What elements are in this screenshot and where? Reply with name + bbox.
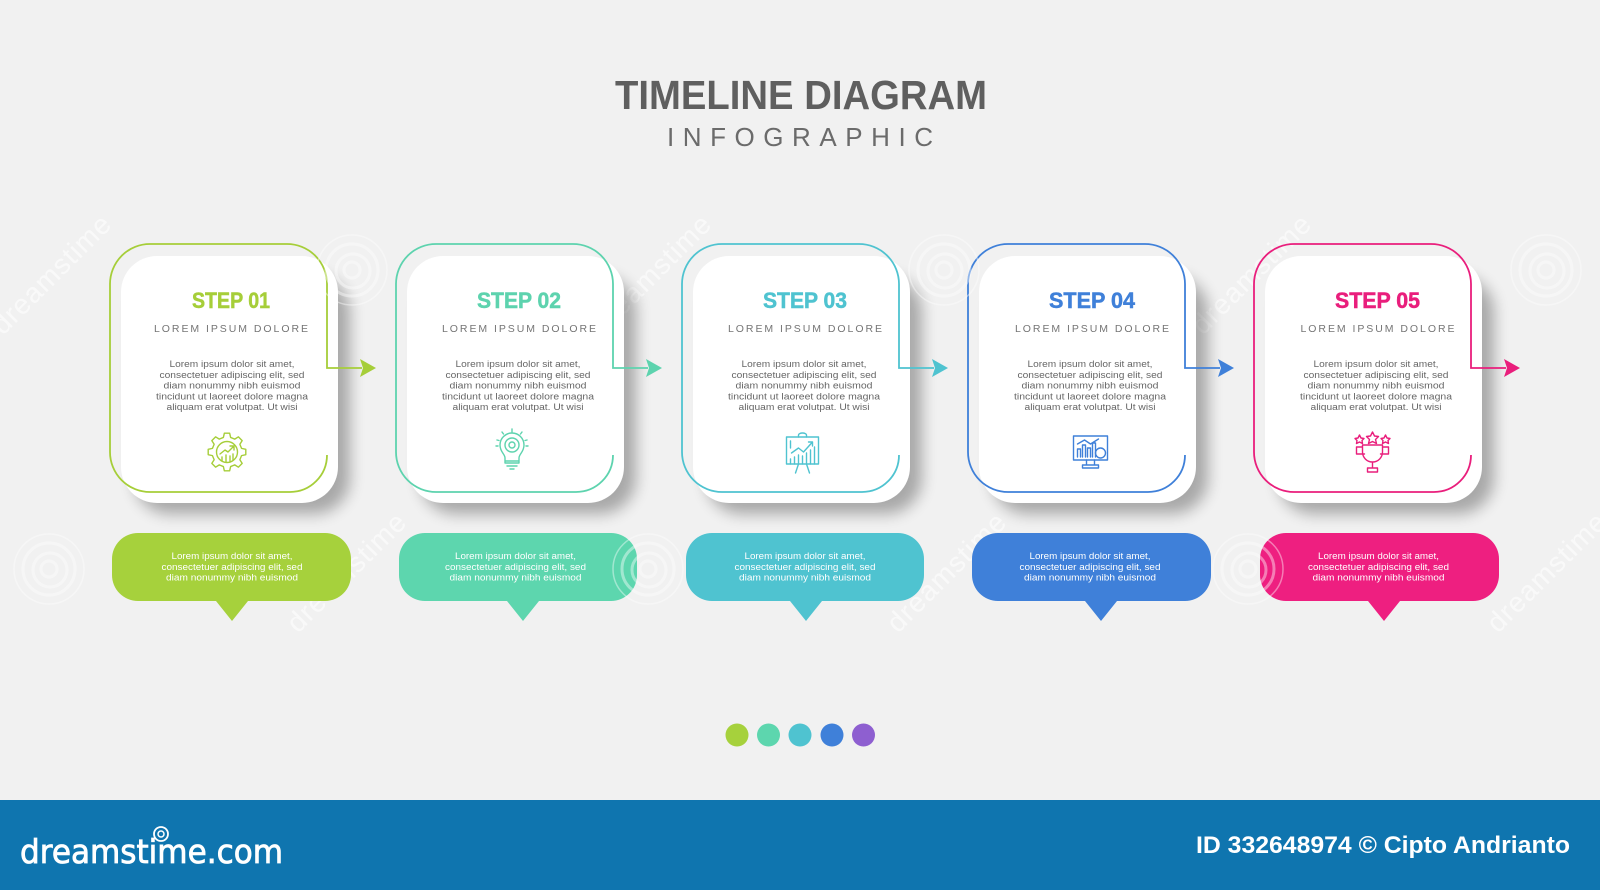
callout: step 02 bubble: Lorem ipsum dolor sit amet, <box>455 551 576 562</box>
panel: step 04: tincidunt ut laoreet dolore magna <box>1014 392 1167 402</box>
panel: step 05: diam nonummy nibh euismod <box>1308 380 1444 392</box>
panel: step 02: Lorem ipsum dolor sit amet, <box>456 359 580 370</box>
callout: step 03 bubble: diam nonummy nibh euismod <box>739 572 871 584</box>
panel: step 01: aliquam erat volutpat. Ut wisi <box>166 402 298 413</box>
panel: step 03: diam nonummy nibh euismod <box>736 380 872 392</box>
panel: step 02: consectetuer adipiscing elit, sed <box>446 370 590 381</box>
panel: step 04: Lorem ipsum dolor sit amet, <box>1028 359 1152 370</box>
panel: step 01: LOREM IPSUM DOLORE <box>154 323 308 335</box>
panel: step 02: aliquam erat volutpat. Ut wisi <box>452 402 584 413</box>
panel: step 04: LOREM IPSUM DOLORE <box>1015 323 1169 335</box>
panel: step 01 <box>110 244 376 514</box>
footer bar <box>0 800 1600 890</box>
panel: step 05: LOREM IPSUM DOLORE <box>1300 323 1454 335</box>
watermark text: dreamstime background: dreamstime <box>1185 208 1318 340</box>
callout: step 05 bubble: Lorem ipsum dolor sit amet, <box>1318 551 1439 562</box>
panel: step 03: consectetuer adipiscing elit, sed <box>732 370 876 381</box>
callout: step 01 bubble <box>112 533 351 621</box>
panel: step 03: STEP 03 <box>763 288 847 313</box>
panel: step 01: diam nonummy nibh euismod <box>164 380 300 392</box>
callout: step 01 bubble: Lorem ipsum dolor sit amet, <box>172 551 292 562</box>
panel: step 05: aliquam erat volutpat. Ut wisi <box>1310 402 1442 413</box>
panel: step 05: tincidunt ut laoreet dolore magna <box>1300 392 1453 402</box>
watermark text: dreamstime background <box>0 208 1600 638</box>
panel: step 01: tincidunt ut laoreet dolore magna <box>156 392 309 402</box>
callout: step 01 bubble: consectetuer adipiscing elit, sed <box>162 562 302 573</box>
panel: step 02: LOREM IPSUM DOLORE <box>442 323 596 335</box>
callout: step 05 bubble: diam nonummy nibh euismod <box>1312 572 1444 584</box>
callout: step 04 bubble: consectetuer adipiscing elit, sed <box>1020 562 1160 573</box>
footer logo: dreamstime.com <box>20 832 283 871</box>
icon: light bulb with gear <box>496 429 528 469</box>
panel: step 04 <box>968 244 1234 514</box>
callout: step 04 bubble: Lorem ipsum dolor sit amet, <box>1030 551 1150 562</box>
panel: step 05: Lorem ipsum dolor sit amet, <box>1314 359 1438 370</box>
callout: step 05 bubble: consectetuer adipiscing elit, sed <box>1308 562 1449 573</box>
panel: step 03: LOREM IPSUM DOLORE <box>728 323 882 335</box>
callout: step 03 bubble: Lorem ipsum dolor sit amet, <box>744 551 866 562</box>
panel: step 04: diam nonummy nibh euismod <box>1022 380 1158 392</box>
panel: step 02: tincidunt ut laoreet dolore magna <box>442 392 595 402</box>
panel: step 03: Lorem ipsum dolor sit amet, <box>742 359 866 370</box>
callout: step 01 bubble: diam nonummy nibh euismod <box>166 572 298 584</box>
icon: presentation easel <box>786 433 818 473</box>
panel: step 04: STEP 04 <box>1049 288 1136 313</box>
panel: step 01: STEP 01 <box>192 288 270 313</box>
icon: gear with chart <box>208 433 246 471</box>
panel: step 01: consectetuer adipiscing elit, sed <box>160 370 304 381</box>
panel: step 05: STEP 05 <box>1335 288 1420 313</box>
panel: step 03: aliquam erat volutpat. Ut wisi <box>738 402 870 413</box>
panel: step 02 <box>396 244 662 514</box>
watermark text: dreamstime background: dreamstime <box>585 208 718 340</box>
panel: step 01: Lorem ipsum dolor sit amet, <box>170 359 294 370</box>
callout: step 02 bubble: consectetuer adipiscing elit, sed <box>445 562 586 573</box>
title: TIMELINE DIAGRAM <box>615 72 987 118</box>
panel: step 04: aliquam erat volutpat. Ut wisi <box>1024 402 1156 413</box>
callout: step 03 bubble <box>686 533 924 621</box>
pagination dots <box>726 724 875 746</box>
panel: step 04: consectetuer adipiscing elit, sed <box>1018 370 1162 381</box>
icon: monitor with charts <box>1074 436 1108 468</box>
subtitle: INFOGRAPHIC <box>667 122 933 152</box>
callout: step 04 bubble: diam nonummy nibh euismod <box>1024 572 1156 584</box>
panel: step 02: STEP 02 <box>477 288 561 313</box>
callout: step 04 bubble <box>972 533 1211 621</box>
watermark text: dreamstime background: dreamstime <box>880 506 1013 638</box>
icon: trophy with stars <box>1355 432 1390 472</box>
watermark spirals <box>14 235 1581 604</box>
footer credit: ID 332648974 © Cipto Andrianto <box>1196 832 1570 859</box>
callout: step 05 bubble <box>1260 533 1499 621</box>
panel: step 02: diam nonummy nibh euismod <box>450 380 586 392</box>
panel: step 05: consectetuer adipiscing elit, sed <box>1304 370 1448 381</box>
panel: step 03: tincidunt ut laoreet dolore magna <box>728 392 881 402</box>
panel: step 03 <box>682 244 948 514</box>
callout: step 03 bubble: consectetuer adipiscing elit, sed <box>734 562 876 573</box>
watermark text: dreamstime background: dreamstime <box>280 506 413 638</box>
panel: step 05 <box>1254 244 1520 514</box>
callout: step 02 bubble: diam nonummy nibh euismod <box>450 572 582 584</box>
callout: step 02 bubble <box>399 533 637 621</box>
